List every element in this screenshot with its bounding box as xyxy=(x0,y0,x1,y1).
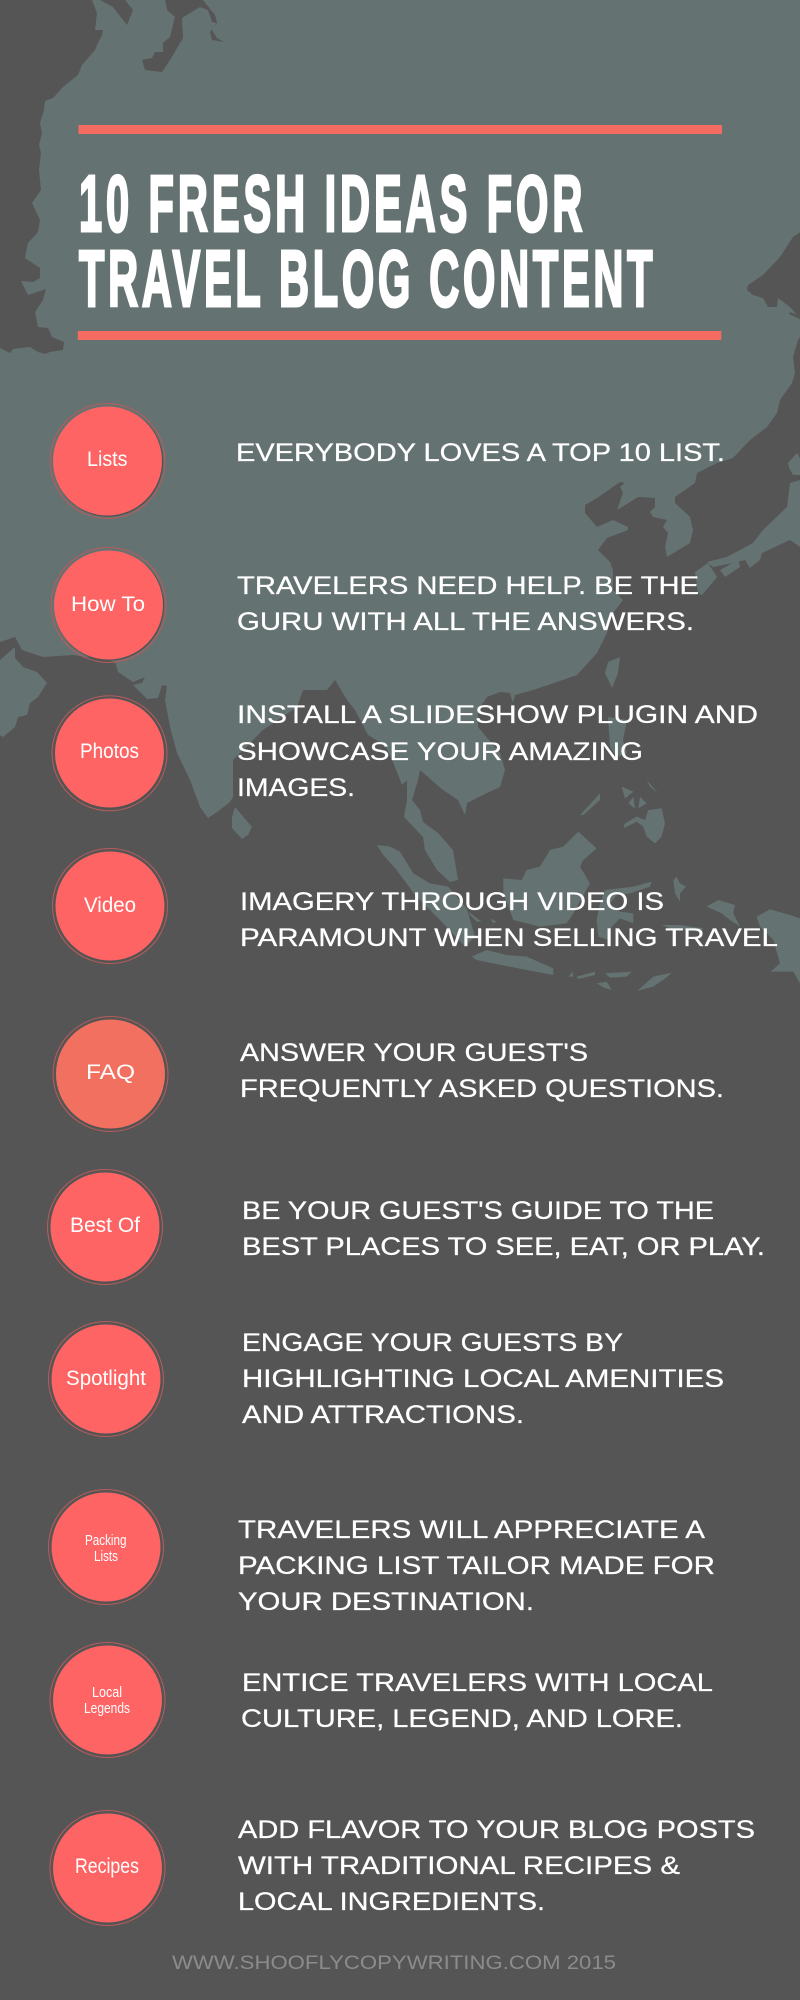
text: how to: GURU WITH ALL THE ANSWERS. xyxy=(237,608,694,636)
badge: best of xyxy=(48,1170,162,1284)
badge: lists xyxy=(50,404,165,518)
text: photos: INSTALL A SLIDESHOW PLUGIN AND xyxy=(237,701,758,729)
item: photos xyxy=(52,696,758,811)
item: lists xyxy=(50,404,725,518)
item: recipes xyxy=(50,1810,755,1926)
text: recipes: LOCAL INGREDIENTS. xyxy=(238,1888,545,1916)
title: TRAVEL BLOG CONTENT xyxy=(79,233,653,324)
badge: lists: Lists xyxy=(87,448,128,471)
text: packing lists xyxy=(238,1516,715,1616)
badge: photos xyxy=(52,696,167,811)
text: recipes: ADD FLAVOR TO YOUR BLOG POSTS xyxy=(238,1816,755,1844)
text: video: IMAGERY THROUGH VIDEO IS xyxy=(240,888,664,916)
badge: faq: FAQ xyxy=(86,1061,135,1084)
text: best of: BE YOUR GUEST'S GUIDE TO THE xyxy=(242,1197,714,1225)
text: recipes xyxy=(238,1816,755,1916)
badge: how to: How To xyxy=(71,593,145,616)
text: lists: EVERYBODY LOVES A TOP 10 LIST. xyxy=(236,439,725,467)
badge: recipes: Recipes xyxy=(75,1855,139,1878)
text: local legends xyxy=(241,1669,713,1733)
badge: how to xyxy=(51,548,166,662)
text: photos: IMAGES. xyxy=(237,774,355,802)
item: local legends xyxy=(50,1642,713,1758)
text: packing lists: PACKING LIST TAILOR MADE FOR xyxy=(238,1552,715,1580)
text: faq: FREQUENTLY ASKED QUESTIONS. xyxy=(240,1075,724,1103)
title bottom bar xyxy=(78,331,721,340)
badge: packing lists: Lists xyxy=(94,1548,118,1565)
text: recipes: WITH TRADITIONAL RECIPES & xyxy=(238,1852,680,1880)
text: spotlight xyxy=(242,1329,724,1429)
text: local legends: CULTURE, LEGEND, AND LORE. xyxy=(241,1705,683,1733)
badge: packing lists: Packing xyxy=(85,1532,126,1549)
badge: video: Video xyxy=(84,894,136,917)
badge: video xyxy=(52,848,168,964)
text: packing lists: YOUR DESTINATION. xyxy=(238,1588,534,1616)
badge: photos: Photos xyxy=(80,740,139,763)
text: photos: SHOWCASE YOUR AMAZING xyxy=(237,738,643,766)
badge: spotlight xyxy=(48,1322,164,1436)
text: faq: ANSWER YOUR GUEST'S xyxy=(240,1039,588,1067)
text: video: PARAMOUNT WHEN SELLING TRAVEL xyxy=(240,924,778,952)
text: photos xyxy=(237,701,758,802)
text: video xyxy=(240,888,778,952)
text: spotlight: AND ATTRACTIONS. xyxy=(242,1401,524,1429)
text: local legends: ENTICE TRAVELERS WITH LOCAL xyxy=(242,1669,713,1697)
badge: faq xyxy=(53,1016,168,1132)
text: packing lists: TRAVELERS WILL APPRECIATE A xyxy=(238,1516,705,1544)
badge: spotlight: Spotlight xyxy=(66,1367,146,1390)
badge: local legends xyxy=(50,1642,165,1758)
footer: WWW.SHOOFLYCOPYWRITING.COM 2015 xyxy=(172,1952,616,1974)
item: spotlight xyxy=(48,1322,724,1436)
map of asia xyxy=(0,0,800,991)
item: packing lists xyxy=(48,1490,715,1616)
title: 10 FRESH IDEAS FOR xyxy=(79,158,582,249)
badge: local legends: Local xyxy=(92,1684,122,1701)
text: faq xyxy=(240,1039,724,1103)
text: best of xyxy=(242,1197,765,1261)
item: faq xyxy=(53,1016,724,1132)
text: best of: BEST PLACES TO SEE, EAT, OR PLAY. xyxy=(242,1233,765,1261)
item: how to xyxy=(51,548,699,662)
text: spotlight: HIGHLIGHTING LOCAL AMENITIES xyxy=(242,1365,724,1393)
title xyxy=(79,158,653,324)
text: how to: TRAVELERS NEED HELP. BE THE xyxy=(237,572,699,600)
item: video xyxy=(52,848,778,964)
text: how to xyxy=(237,572,699,636)
text: spotlight: ENGAGE YOUR GUESTS BY xyxy=(242,1329,623,1357)
badge: packing lists xyxy=(48,1490,164,1604)
badge: local legends: Legends xyxy=(84,1700,130,1717)
item: best of xyxy=(48,1170,765,1284)
badge: best of: Best Of xyxy=(70,1214,140,1237)
badge: recipes xyxy=(50,1810,165,1926)
title top bar xyxy=(78,125,722,134)
